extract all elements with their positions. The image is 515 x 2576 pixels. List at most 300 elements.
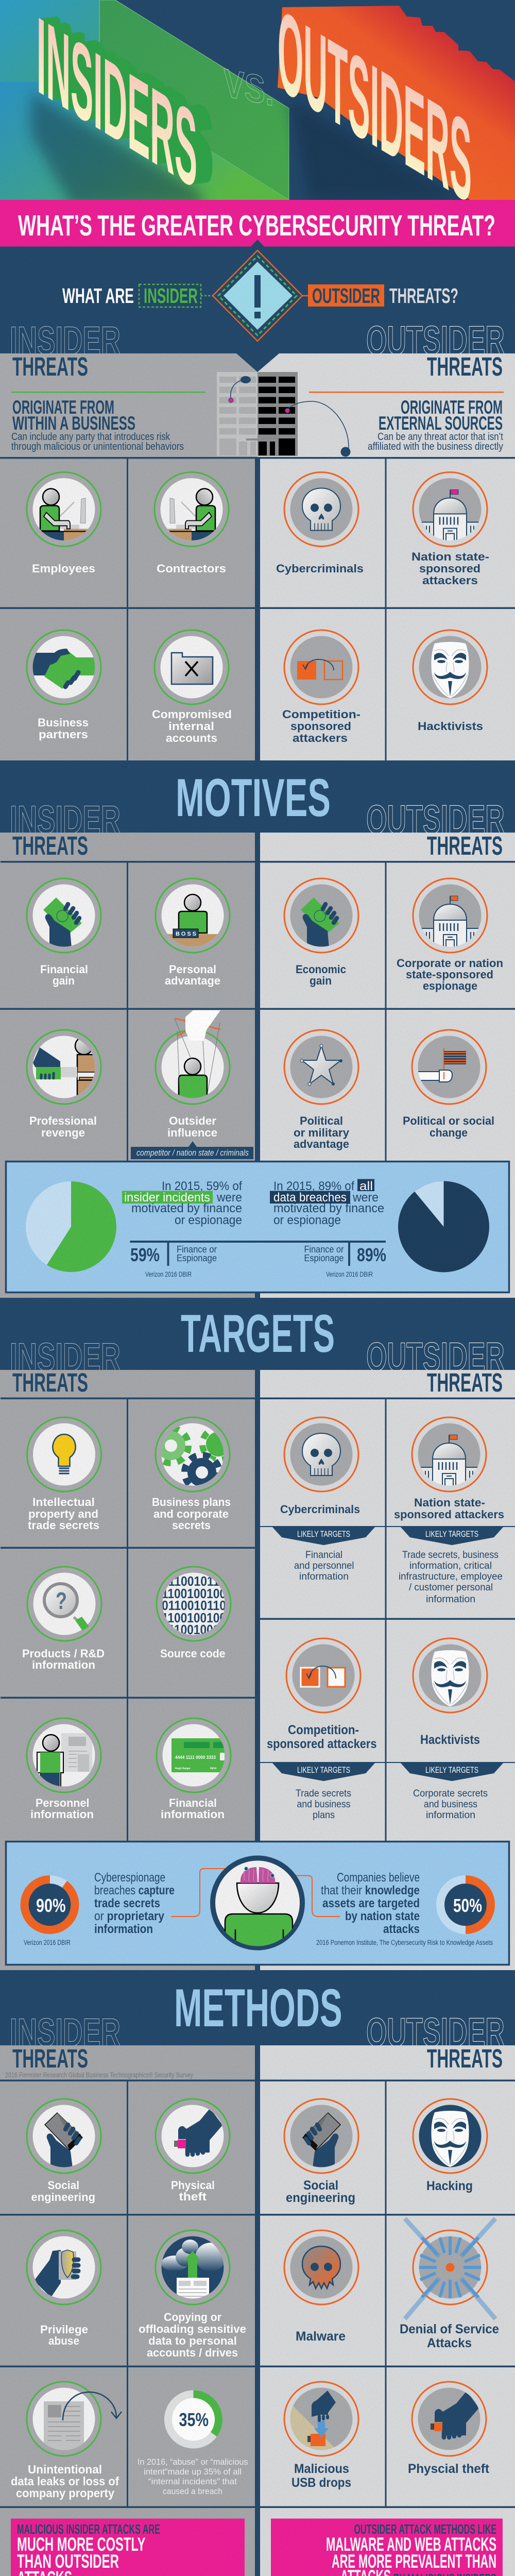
- card: source code: [157, 1567, 231, 1660]
- card: denial of service: [400, 2218, 499, 2350]
- knowledge assets text: [321, 1871, 420, 1936]
- label: [411, 550, 489, 587]
- stat label left: Espionage: [177, 1253, 217, 1263]
- likely targets list: and business: [424, 1799, 477, 1810]
- outsider path arc: [285, 401, 350, 456]
- label: [29, 1114, 97, 1139]
- stat description: [138, 2457, 248, 2496]
- cyberespionage text: breaches capture: [94, 1884, 175, 1897]
- likely targets list: information: [299, 1571, 349, 1582]
- likely targets list: information: [426, 1810, 475, 1821]
- label: Source code: [160, 1647, 226, 1660]
- stat description: intent”made up 35% of all: [144, 2467, 242, 2477]
- outsider motive stat text: motivated by finance: [273, 1201, 384, 1215]
- label: engineering: [286, 2191, 355, 2205]
- label: theft: [179, 2190, 207, 2203]
- label: property and: [28, 1507, 98, 1520]
- icon: brain figure: [213, 1858, 302, 1953]
- icon: swapped documents: [284, 630, 358, 704]
- icon: gears: [153, 1417, 234, 1492]
- source right: Verizon 2016 DBIR: [326, 1270, 373, 1278]
- label: Political: [300, 1114, 343, 1127]
- label: partners: [39, 728, 88, 741]
- label: [40, 963, 88, 987]
- icon: puppet on strings: [156, 1010, 230, 1104]
- label: Competition-: [288, 1723, 359, 1737]
- grid lines: [0, 457, 515, 760]
- stat rule and dividers: [130, 1242, 386, 1266]
- icon: cash in hand: [27, 878, 101, 953]
- label: [152, 1496, 231, 1532]
- likely targets list: [399, 1550, 503, 1605]
- outline heading insider 4: INSIDER: [10, 2011, 121, 2055]
- icon: binary code: 0110010110: [162, 1573, 226, 1589]
- label: Malware: [296, 2329, 346, 2344]
- label: revenge: [41, 1126, 85, 1139]
- cyberespionage text: trade secrets: [94, 1896, 160, 1910]
- outsider motive stat text: In 2015, 89% of: [273, 1179, 354, 1193]
- label: Copying or: [164, 2311, 221, 2324]
- likely targets list: and business: [297, 1799, 350, 1810]
- knowledge assets text: Companies believe: [337, 1871, 420, 1885]
- icon: hand taking drive: [156, 2099, 230, 2173]
- diamond warning icon: [213, 250, 302, 341]
- label: advantage: [294, 1138, 349, 1150]
- label: [291, 2462, 351, 2490]
- label: gain: [53, 974, 75, 987]
- label: [31, 2179, 95, 2204]
- label: Cybercriminals: [280, 1503, 360, 1516]
- label: [400, 2322, 499, 2350]
- label: Employees: [32, 562, 95, 575]
- cyberespionage text: [94, 1871, 175, 1936]
- hero: insiders vs outsiders: [0, 0, 515, 200]
- icon: hand taking drive: [412, 2382, 486, 2456]
- left panel: [0, 833, 255, 1298]
- label: influence: [167, 1126, 217, 1139]
- label: [171, 2179, 215, 2203]
- likely targets ribbon: [400, 1762, 504, 1781]
- card: social engineering outsider: [284, 2099, 358, 2205]
- outsider tag: OUTSIDER: [312, 284, 380, 308]
- right gray panel: [258, 353, 515, 458]
- callout: insider cost: MUCH MORE COSTLY: [17, 2534, 146, 2555]
- icon: phone in hand: [284, 2099, 358, 2173]
- threats label left: THREATS: [12, 2044, 88, 2073]
- card: personal advantage: [156, 878, 230, 987]
- label: Social: [303, 2178, 338, 2193]
- icon: credit card: Hugh Hunger: [175, 1767, 191, 1770]
- panel: who insiders and outsiders are: [0, 352, 515, 760]
- title band: [0, 200, 515, 246]
- grid lines: [0, 2079, 515, 2508]
- panel: motive stats: [6, 1161, 509, 1292]
- callout: insider cost: [11, 2518, 245, 2576]
- label: USB drops: [291, 2476, 351, 2490]
- likely targets list: [294, 1550, 354, 1582]
- icon: binary code: [157, 1567, 231, 1641]
- icon: skull: [284, 472, 358, 546]
- outsider origin description: [368, 431, 503, 452]
- label: Outsider: [169, 1114, 216, 1127]
- chart: 90 percent donut: 90%: [36, 1895, 66, 1916]
- likely targets ribbon: LIKELY TARGETS: [425, 1765, 478, 1775]
- label: Privilege: [40, 2323, 88, 2336]
- label: and corporate: [153, 1507, 229, 1520]
- icon: phone in hand: [27, 2099, 101, 2173]
- card: products r&d: [22, 1567, 105, 1671]
- icon: employee at desk: [27, 472, 101, 546]
- icon: handshake: [27, 630, 101, 704]
- label: or military: [294, 1126, 350, 1139]
- icon: capitol: [412, 1417, 486, 1492]
- label: Personnel: [36, 1797, 90, 1809]
- insider origin heading: [12, 397, 135, 434]
- insider origin heading: WITHIN A BUSINESS: [12, 413, 135, 434]
- panel: targets: [0, 1368, 515, 1970]
- card: physical theft outsider: [408, 2382, 490, 2476]
- panel: methods: [0, 2044, 515, 2576]
- knowledge assets text: that their knowledge: [321, 1884, 420, 1897]
- icon: capitol: [413, 472, 487, 546]
- label: Nation state-: [414, 1496, 485, 1509]
- card: personnel information: [27, 1718, 101, 1821]
- label: Intellectual: [32, 1496, 95, 1509]
- callout: insider cost: MALICIOUS INSIDER ATTACKS ARE: [17, 2521, 160, 2537]
- insider origin heading: ORIGINATE FROM: [12, 397, 114, 418]
- label: espionage: [423, 979, 477, 992]
- label: accounts: [166, 732, 217, 744]
- card: social engineering insider: [27, 2099, 101, 2204]
- callout: outsider prevalence: [271, 2518, 503, 2576]
- outsiders extrusion: [278, 6, 515, 200]
- label: [139, 2311, 246, 2359]
- label: Professional: [29, 1114, 97, 1127]
- heading: methods: METHODS: [174, 1978, 342, 2038]
- likely targets list: Corporate secrets: [413, 1788, 488, 1799]
- card: 35 percent stat: [138, 2394, 248, 2496]
- chart: 89 percent pie: [398, 1181, 489, 1273]
- knowledge assets text: assets are targeted: [322, 1896, 420, 1910]
- label: [28, 1496, 99, 1532]
- likely targets list: information: [426, 1594, 475, 1605]
- likely targets list: / customer personal: [409, 1582, 493, 1593]
- icon: binary code: 1100100100: [162, 1610, 226, 1625]
- threats label left: THREATS: [12, 831, 88, 860]
- label: Hacking: [426, 2179, 473, 2193]
- label: [167, 1114, 217, 1139]
- label: attackers: [293, 732, 348, 744]
- question row with diamond: [62, 250, 458, 341]
- icon: document with arrow: [27, 2382, 122, 2456]
- outsider motive stat text: data breaches: [273, 1191, 347, 1205]
- icon: swapped documents: [286, 1638, 360, 1713]
- icon: infected skull: [284, 2230, 358, 2304]
- icon: office building: [217, 372, 298, 456]
- label: abuse: [48, 2334, 79, 2347]
- stat label left: Finance or: [177, 1244, 217, 1255]
- likely targets list: information, critical: [409, 1561, 492, 1571]
- icon: skull: [284, 1417, 358, 1492]
- label: [296, 963, 346, 987]
- icon: magnifier: [27, 1567, 101, 1641]
- orange rule: [309, 392, 504, 393]
- outsider tag: [308, 284, 384, 308]
- left panel: [0, 2045, 255, 2576]
- label: trade secrets: [28, 1519, 99, 1532]
- stat description: caused a breach: [163, 2486, 222, 2496]
- connector lines: [201, 295, 213, 296]
- label: [394, 1496, 504, 1521]
- chart: 35 percent donut: [168, 2394, 218, 2445]
- cyberespionage text: Cyberespionage: [94, 1871, 165, 1885]
- label: advantage: [165, 974, 220, 987]
- label: attackers: [422, 574, 478, 587]
- label: information: [32, 1658, 95, 1671]
- label: sponsored: [290, 720, 351, 733]
- label: Physcial theft: [408, 2462, 490, 2476]
- label: Denial of Service: [400, 2322, 499, 2336]
- icon: mask: [413, 630, 487, 704]
- label: Malicious: [294, 2462, 349, 2476]
- icon: binary code: 0110010010: [162, 1622, 226, 1637]
- label: [282, 708, 360, 744]
- threats label left: THREATS: [12, 352, 88, 381]
- card: hacktivists: [413, 630, 487, 733]
- likely targets list: [296, 1788, 351, 1821]
- icon: cloud upload: [156, 2230, 230, 2304]
- likely targets list: and personnel: [294, 1561, 354, 1571]
- insider motive stat text: motivated by finance: [131, 1201, 242, 1215]
- icon: credit card: 4444 1111 0000 3333: [175, 1755, 216, 1760]
- vs outline: VS.: [224, 61, 274, 114]
- card: outsider influence: [131, 1010, 253, 1159]
- label: information: [30, 1808, 94, 1821]
- icon: fist with flag: [412, 1030, 486, 1104]
- label: secrets: [172, 1519, 211, 1532]
- card: compromised accounts: [152, 630, 232, 744]
- label: Cybercriminals: [276, 562, 364, 575]
- card: business plans: [152, 1417, 234, 1532]
- insider origin description: Can include any party that introduces risk: [11, 431, 170, 443]
- label: Personal: [169, 963, 216, 976]
- label: Economic: [296, 963, 346, 976]
- label: Compromised: [152, 708, 232, 721]
- card: contractors: [154, 472, 229, 575]
- likely targets ribbon: [272, 1527, 375, 1545]
- label: [267, 1723, 377, 1751]
- insider origin description: through malicious or unintentional behaviors: [11, 441, 184, 452]
- stat 59 percent: 59%: [130, 1244, 160, 1265]
- heading: targets: TARGETS: [181, 1304, 335, 1364]
- card: political or military advantage: [284, 1030, 358, 1150]
- label: accounts / drives: [147, 2346, 238, 2359]
- icon: boss: [156, 878, 230, 953]
- icon: contractor at desk: [154, 472, 229, 546]
- outline heading insider 3: INSIDER: [10, 1335, 121, 1379]
- what are: WHAT ARE: [62, 284, 134, 308]
- label: Physical: [171, 2179, 215, 2192]
- label: [40, 2323, 88, 2347]
- label: Social: [47, 2179, 79, 2192]
- likely targets list: [413, 1788, 488, 1821]
- card: privilege abuse: [27, 2230, 101, 2347]
- outsider motive stat text: [270, 1179, 384, 1227]
- icon: boss: BOSS: [176, 931, 196, 937]
- callout: competitor / nation state / criminals: competitor / nation state / criminals: [136, 1148, 249, 1158]
- green rule: [11, 392, 205, 393]
- stat label right: [304, 1244, 344, 1263]
- insider motive stat text: In 2015, 59% of: [162, 1179, 242, 1193]
- label: Political or social: [403, 1114, 494, 1127]
- card: economic gain: [284, 878, 358, 987]
- grid lines: [0, 833, 515, 1162]
- icon: person with document: [27, 1718, 101, 1792]
- stat 89 percent: 89%: [357, 1244, 386, 1265]
- label: [397, 957, 503, 992]
- source: forrester: 2016 Forrester Research Global Business Technographics® Security Survey: [5, 2071, 193, 2079]
- label: company property: [16, 2486, 114, 2500]
- label: Products / R&D: [22, 1647, 105, 1660]
- icon: magnifier: ?: [56, 1587, 67, 1614]
- label: [22, 1647, 105, 1671]
- stat description: “internal incidents” that: [148, 2477, 237, 2486]
- insider motive stat text: were: [216, 1191, 242, 1205]
- chart: 90 percent donut: [14, 1870, 85, 1940]
- left panel: [0, 1370, 255, 1970]
- icon: usb dropped: [284, 2382, 358, 2456]
- likely targets list: Financial: [305, 1550, 342, 1561]
- card: copying data: [139, 2230, 246, 2359]
- label: data leaks or loss of: [11, 2475, 119, 2488]
- stat label left: [177, 1244, 217, 1263]
- likely targets ribbon: LIKELY TARGETS: [425, 1529, 478, 1539]
- shadow under outsiders letters: [289, 98, 464, 200]
- label: [165, 963, 220, 987]
- card: nation state: [411, 472, 489, 587]
- hero floor: [0, 82, 289, 200]
- outline heading insider 1: INSIDER: [10, 319, 121, 363]
- likely targets ribbon: LIKELY TARGETS: [297, 1765, 350, 1775]
- icon: binary code: 1100100100: [162, 1586, 226, 1601]
- icon: folder with x: [154, 630, 229, 704]
- card: hacking: [413, 2099, 487, 2193]
- card: espionage: [397, 878, 503, 992]
- label: sponsored attackers: [267, 1737, 377, 1751]
- label: sponsored: [419, 562, 480, 575]
- label: state-sponsored: [406, 968, 493, 981]
- label: change: [430, 1126, 468, 1139]
- label: Nation state-: [411, 550, 489, 563]
- chart: 35 percent donut: 35%: [179, 2409, 209, 2430]
- likely targets ribbon: [272, 1762, 375, 1781]
- stat label right: Espionage: [304, 1253, 344, 1263]
- label: engineering: [31, 2191, 95, 2204]
- card: hacktivists: [400, 1638, 504, 1821]
- label: internal: [168, 720, 214, 733]
- label: [161, 1797, 225, 1821]
- label: Hacktivists: [418, 720, 483, 733]
- label: Business: [38, 716, 89, 729]
- band notch: [251, 240, 264, 246]
- icon: cash in hand: [284, 878, 358, 953]
- insider motive stat text: or espionage: [175, 1213, 242, 1227]
- card: employees: [27, 472, 101, 575]
- source left: Verizon 2016 DBIR: [24, 1939, 71, 1946]
- insider tag: [139, 284, 201, 308]
- label: [11, 2463, 119, 2500]
- label: sponsored attackers: [394, 1508, 504, 1521]
- label: Hacktivists: [420, 1733, 480, 1747]
- likely targets ribbon: [400, 1527, 504, 1545]
- callout: competitor / nation state / criminals: [131, 1141, 253, 1159]
- label: Financial: [169, 1797, 217, 1809]
- icon: revenge handoff: [27, 1030, 101, 1104]
- grid lines: [1, 1397, 515, 1841]
- hero left wall: [0, 0, 99, 82]
- icon: capitol: [413, 878, 487, 953]
- hero green wall: [99, 0, 289, 200]
- label: Competition-: [282, 708, 360, 721]
- left grid panel: [0, 458, 255, 760]
- card: business partners: [27, 630, 101, 741]
- cyberespionage text: or proprietary: [94, 1909, 165, 1923]
- card: financial information: [157, 1718, 231, 1821]
- likely targets list: plans: [313, 1810, 335, 1821]
- icon: lightbulb: [27, 1417, 101, 1492]
- stat label right: Finance or: [304, 1244, 344, 1255]
- icon: binary code: 0110010110: [162, 1598, 226, 1613]
- icon: star badge: [284, 1030, 358, 1104]
- label: [30, 1797, 94, 1821]
- outsider motive stat text: were: [352, 1191, 379, 1205]
- label: [294, 1114, 350, 1150]
- chart: 59 percent pie: [26, 1181, 116, 1272]
- icon: credit card: [157, 1718, 231, 1792]
- panel: espionage stats: [6, 1841, 509, 1965]
- outline heading insider 2: INSIDER: [10, 798, 121, 842]
- label: Financial: [40, 963, 88, 976]
- right panel: [260, 2045, 515, 2576]
- likely targets list: infrastructure, employee: [399, 1571, 503, 1582]
- threats?: THREATS?: [389, 284, 458, 308]
- callout: insider cost: THAN OUTSIDER: [17, 2551, 119, 2572]
- label: offloading sensitive: [139, 2323, 246, 2335]
- insider motive stat text: insider incidents: [124, 1191, 210, 1205]
- card: malware: [284, 2230, 358, 2344]
- heading: motives: MOTIVES: [176, 768, 331, 828]
- stat description: In 2016, “abuse” or “malicious: [138, 2457, 248, 2467]
- card: competition: [282, 630, 360, 744]
- card: cybercriminals: [276, 472, 364, 575]
- chart: 50 percent donut: 50%: [453, 1895, 482, 1916]
- label: information: [161, 1808, 225, 1821]
- likely targets list: Trade secrets: [296, 1788, 351, 1799]
- chart: 50 percent donut: [436, 1875, 495, 1934]
- likely targets ribbon: LIKELY TARGETS: [297, 1529, 350, 1539]
- label: Contractors: [157, 562, 226, 575]
- label: Corporate or nation: [397, 957, 503, 970]
- likely targets list: Trade secrets, business: [402, 1550, 499, 1561]
- card: financial gain: [27, 878, 101, 987]
- connector lines: [171, 1869, 340, 1917]
- left gray panel: [0, 353, 258, 458]
- card: intellectual property: [27, 1417, 101, 1532]
- label: [286, 2178, 355, 2205]
- card: professional revenge: [27, 1030, 101, 1139]
- knowledge assets text: attacks: [383, 1922, 420, 1936]
- threats label left: THREATS: [12, 1368, 88, 1397]
